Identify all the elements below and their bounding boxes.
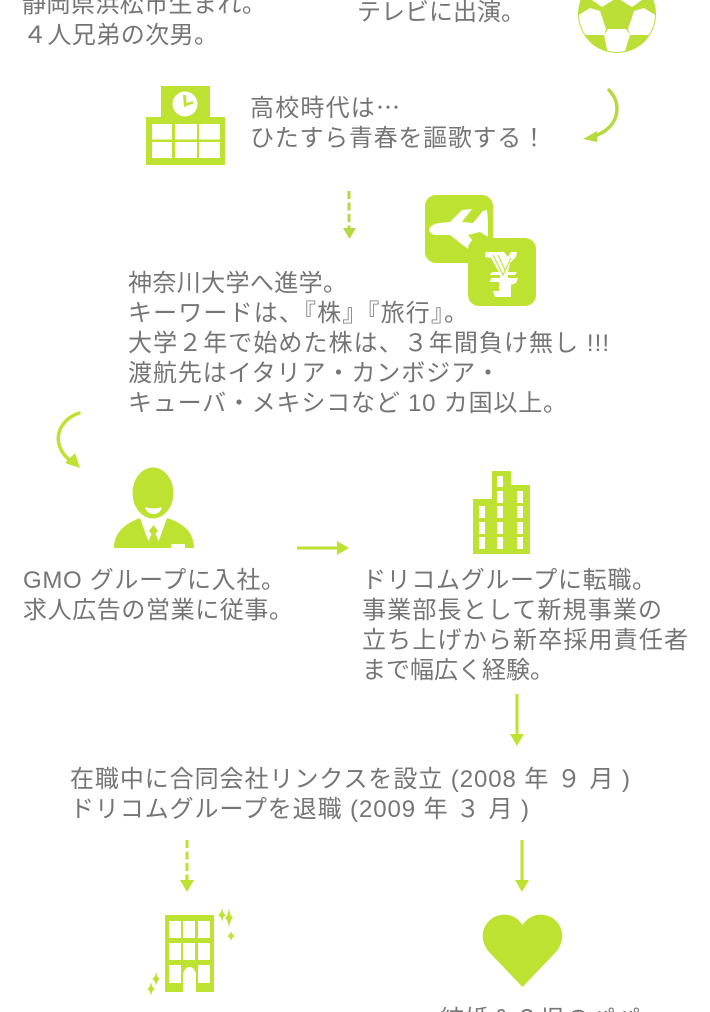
text: high school: ひたすら青春を謳歌する！ [250,125,546,152]
text: high school: 高校時代は… [250,88,400,123]
text: university: キーワードは、『株』『旅行』。 [128,300,468,327]
icon: soccer ball [578,0,656,53]
text: GMO [23,567,293,624]
text: university: 神奈川大学へ進学。 [128,270,347,297]
text: founding [70,766,630,823]
icon: businessman [114,468,194,548]
text: university: 渡航先はイタリア・カンボジア・ [128,360,500,387]
text: Dricom [362,567,688,684]
arrow: curved to high school [583,90,617,142]
icon: sparkling company building [147,908,235,996]
text: GMO: 求人広告の営業に従事。 [23,597,293,624]
text: high school [250,88,546,152]
arrow: right to Dricom [297,541,349,555]
text: founding: ドリコムグループを退職 (2009 年 ３ 月 ) [70,796,529,823]
icon: office building [473,471,530,554]
text: birthplace [22,0,266,49]
icon: school [146,86,225,165]
arrow: dashed down to company [180,840,194,892]
text: birthplace: ４人兄弟の次男。 [23,22,218,49]
icon: airplane and yen [425,195,536,306]
icon: heart [483,915,562,987]
arrow: down to family [515,840,529,892]
text: Dricom: ドリコムグループに転職。 [362,567,656,594]
arrow: dashed down to university [343,191,356,239]
text: university [128,270,609,417]
text: university: キューバ・メキシコなど 10 カ国以上。 [128,390,567,417]
text: university: 大学２年で始めた株は、３年間負け無し !!! [128,330,609,357]
text: Dricom: 立ち上げから新卒採用責任者 [362,627,688,654]
text: Dricom: 事業部長として新規事業の [362,597,662,624]
arrow: curved to GMO [58,413,80,468]
text: Dricom: まで幅広く経験。 [362,657,554,684]
text: GMO: GMO グループに入社。 [23,567,285,594]
text: founding: 在職中に合同会社リンクスを設立 (2008 年 ９ 月 ) [70,766,630,793]
arrow: down to founding [510,694,524,746]
